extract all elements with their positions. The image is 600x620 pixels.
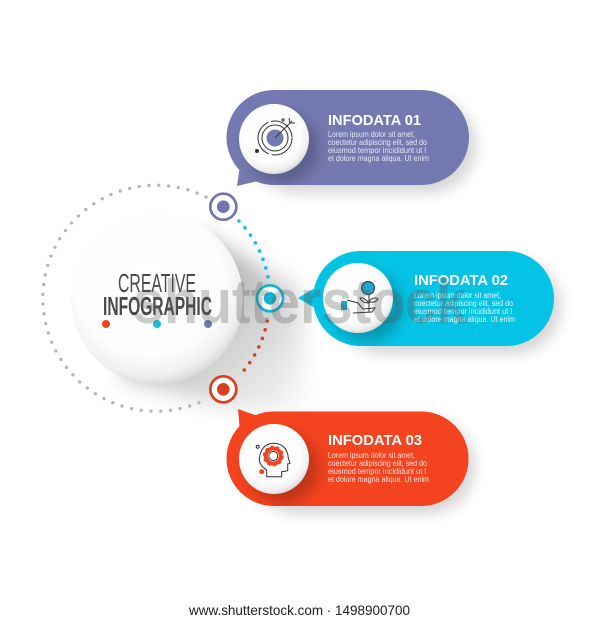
text block: 03 [328, 451, 429, 484]
dotted arc: cyan [239, 221, 268, 277]
shadow: card 3 [250, 419, 475, 514]
text block: 02: Lorem ipsum dolor sit amet, [414, 291, 501, 300]
marker: red ring [210, 376, 236, 402]
shadow: card 2 [336, 259, 561, 354]
title: creative infographic: INFOGRAPHIC [103, 291, 212, 321]
heading: infodata 03: INFODATA 03 [328, 432, 422, 449]
text block: 01: et dolore magna aliqua. Ut enim [328, 154, 429, 163]
heading: infodata 02: INFODATA 02 [414, 272, 508, 289]
text block: 01: coectetur adipiscing elit, sed do [328, 138, 428, 147]
shadow: ball 3 [248, 433, 318, 503]
panel: infodata 01 [226, 90, 469, 186]
shadow: ball 2 [332, 272, 402, 342]
heading: infodata 01: INFODATA 01 [328, 112, 421, 129]
marker: purple ring [210, 194, 236, 220]
watermark: shutterstock [133, 268, 467, 337]
panel: infodata 03 [226, 409, 468, 506]
dotted ring: grey [43, 185, 206, 411]
text block: 03: Lorem ipsum dolor sit amet, [328, 451, 415, 460]
shadow: central sphere [120, 235, 305, 420]
text block: 03: coectetur adipiscing elit, sed do [328, 459, 428, 468]
text block: 01: eiusmod tempor incididunt ut l [328, 146, 426, 155]
shadow: card 1 [250, 98, 476, 193]
title: creative infographic: CREATIVE [118, 268, 196, 298]
panel: infodata 02 [298, 251, 554, 346]
text block: 03: et dolore magna aliqua. Ut enim [328, 475, 429, 484]
text block: 02: et dolore magna aliqua. Ut enim [414, 315, 515, 324]
dotted arc: red [240, 321, 267, 375]
text block: 02 [414, 291, 515, 324]
icon: target [255, 118, 295, 155]
text block: 02: coectetur adipiscing elit, sed do [414, 299, 514, 308]
text block: 03: eiusmod tempor incididunt ut l [328, 467, 426, 476]
shadow: ball 1 [248, 113, 318, 183]
central sphere [71, 212, 243, 384]
footer url: www.shutterstock.com · 1498900700 [188, 602, 410, 618]
text block: 01: Lorem ipsum dolor sit amet, [328, 130, 415, 139]
legend dots [102, 320, 212, 328]
title: creative infographic [103, 268, 212, 321]
text block: 01 [328, 130, 429, 163]
icon: head with gear [256, 443, 290, 477]
text block: 02: eiusmod tempor incididunt ut l [414, 307, 512, 316]
marker: cyan ring [257, 285, 283, 311]
icon: money plant [341, 282, 378, 313]
